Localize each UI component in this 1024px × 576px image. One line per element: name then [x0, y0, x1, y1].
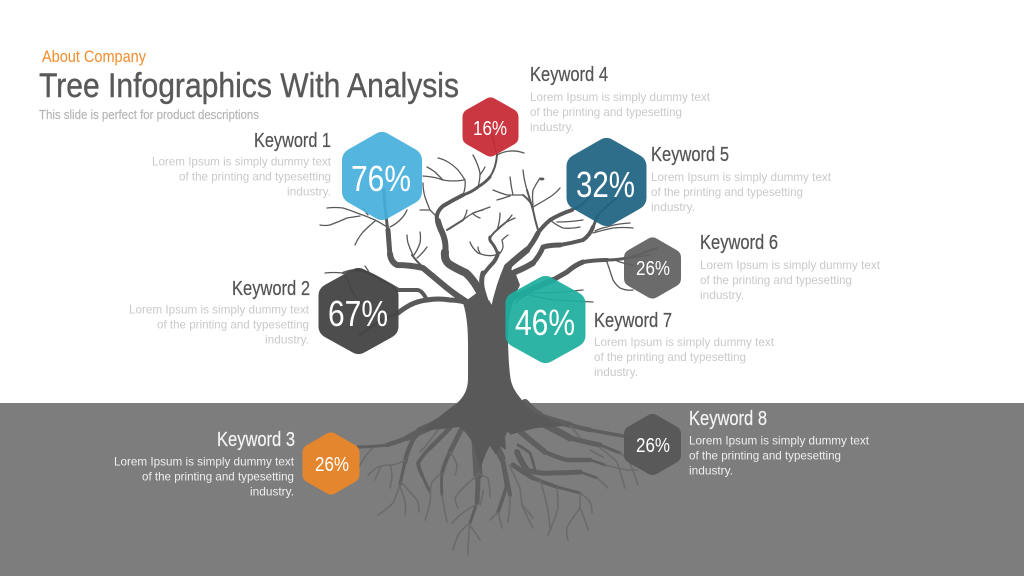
keyword 3 text: of the printing and typesetting: [142, 470, 294, 484]
keyword 4 text: industry.: [530, 120, 574, 134]
keyword 2 text: of the printing and typesetting: [157, 318, 309, 332]
icon: bird leaf: [540, 178, 544, 180]
keyword 7 text: [594, 310, 775, 379]
hexagon 67%: [328, 280, 388, 342]
keyword 8 text: Lorem Ipsum is simply dummy text: [689, 434, 870, 448]
keyword 4 text: Lorem Ipsum is simply dummy text: [530, 90, 711, 104]
keyword 4 text: [530, 64, 711, 134]
keyword 6 text: industry.: [700, 288, 744, 302]
keyword 8 text: Keyword 8: [689, 408, 767, 430]
hexagon 26% gray: [632, 246, 672, 290]
keyword 5 text: [651, 144, 832, 214]
hexagon 26% gray: 26%: [636, 258, 670, 280]
hexagon 46%: [515, 288, 575, 351]
keyword 1 text: industry.: [287, 184, 331, 198]
header: [39, 47, 459, 122]
keyword 5 text: Keyword 5: [651, 144, 729, 166]
hexagon 32%: [576, 150, 635, 214]
root gap: [504, 432, 516, 456]
hexagon 26% dark: 26%: [636, 435, 670, 457]
keyword 2 text: industry.: [265, 332, 309, 346]
keyword 6 text: of the printing and typesetting: [700, 273, 852, 287]
tree illustration: [320, 133, 657, 555]
hexagon 46%: 46%: [515, 302, 575, 343]
keyword 5 text: Lorem Ipsum is simply dummy text: [651, 170, 832, 184]
hexagon 26% orange: [311, 441, 351, 486]
keyword 4 text: Keyword 4: [530, 64, 608, 86]
keyword 1 text: of the printing and typesetting: [179, 170, 331, 184]
hexagon 16%: 16%: [473, 118, 507, 140]
keyword 1 text: Keyword 1: [254, 130, 331, 152]
hexagon 16%: [471, 106, 510, 148]
keyword 1 text: [152, 130, 332, 198]
keyword 6 text: Keyword 6: [700, 232, 778, 254]
hexagon 76%: 76%: [351, 158, 411, 199]
keyword 8 text: [689, 408, 870, 478]
keyword 8 text: of the printing and typesetting: [689, 448, 841, 462]
keyword 3 text: [114, 429, 295, 498]
hexagon 26% dark: [632, 422, 672, 466]
keyword 3 text: Keyword 3: [217, 429, 295, 451]
keyword 5 text: industry.: [651, 200, 695, 214]
subtitle: This slide is perfect for product descriptions: [39, 107, 259, 122]
keyword 7 text: of the printing and typesetting: [594, 350, 746, 364]
hexagon 26% orange: 26%: [315, 454, 349, 476]
hexagon 76%: [351, 144, 411, 208]
keyword 7 text: industry.: [594, 365, 638, 379]
keyword 2 text: Keyword 2: [232, 278, 310, 300]
keyword 2 text: Lorem Ipsum is simply dummy text: [129, 302, 310, 316]
ground panel: [0, 403, 1024, 576]
keyword 3 text: industry.: [250, 484, 294, 498]
keyword 7 text: Lorem Ipsum is simply dummy text: [594, 335, 775, 349]
eyebrow: About Company: [42, 47, 146, 66]
keyword 4 text: of the printing and typesetting: [530, 105, 682, 119]
keyword 3 text: Lorem Ipsum is simply dummy text: [114, 454, 295, 468]
keyword 2 text: [129, 278, 310, 346]
keyword 6 text: Lorem Ipsum is simply dummy text: [700, 258, 881, 272]
roots: [356, 403, 650, 555]
keyword 6 text: [700, 232, 881, 302]
trunk: [420, 267, 565, 470]
keyword 8 text: industry.: [689, 464, 733, 478]
hexagon 67%: 67%: [328, 293, 388, 334]
branches: [320, 133, 657, 335]
hexagon 32%: 32%: [576, 164, 635, 205]
keyword 1 text: Lorem Ipsum is simply dummy text: [152, 154, 332, 168]
keyword 7 text: Keyword 7: [594, 310, 672, 332]
title: Tree Infographics With Analysis: [39, 67, 459, 105]
keyword 5 text: of the printing and typesetting: [651, 185, 803, 199]
